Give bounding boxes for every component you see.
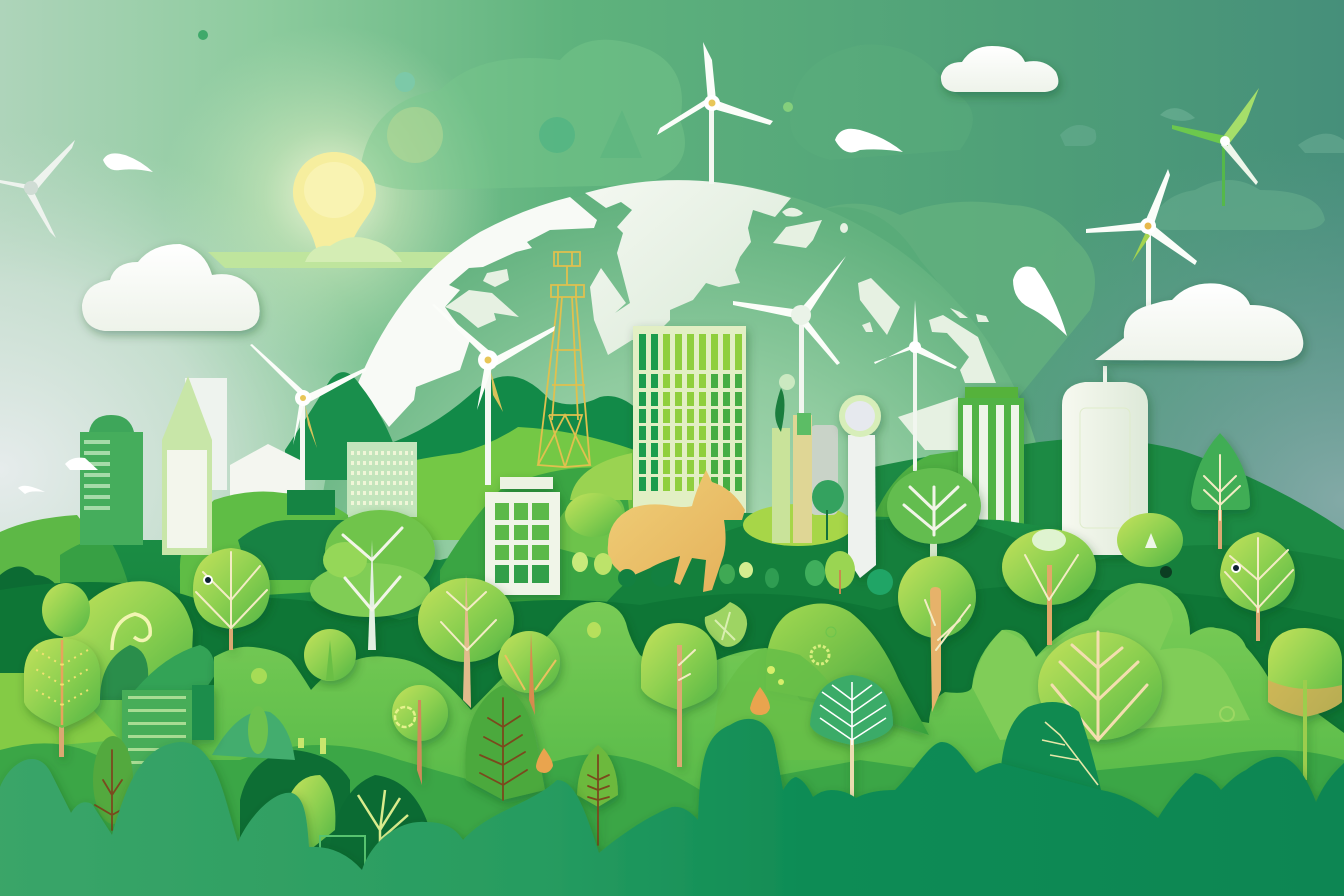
base dark ground bbox=[0, 510, 1344, 896]
teal arch bbox=[212, 711, 295, 760]
bare pale tree bbox=[358, 790, 408, 855]
tree: white crown above lamp bbox=[887, 468, 981, 560]
tree: round upper right bbox=[1002, 529, 1096, 645]
land: islands bbox=[445, 208, 996, 450]
right side mid hill bbox=[880, 518, 1344, 700]
land: west crescent bbox=[358, 197, 597, 427]
faint background clouds and bubbles bbox=[198, 30, 1344, 230]
background left buildings bbox=[185, 378, 417, 517]
large white building bbox=[1062, 366, 1148, 555]
small fence frame bbox=[320, 836, 365, 870]
wind turbine: right bbox=[1086, 169, 1197, 306]
grassy oval bbox=[743, 504, 853, 546]
wind turbine: centre left bbox=[432, 304, 555, 485]
dark oval hollow bbox=[240, 750, 350, 850]
tree: small lime ball bbox=[498, 631, 560, 715]
white back tower bbox=[185, 378, 227, 490]
striped building bbox=[958, 387, 1024, 528]
lamp tower bbox=[839, 395, 881, 578]
right horizon bbox=[860, 439, 1344, 640]
pale dotted building bbox=[347, 442, 417, 517]
bare tree on dark hill bbox=[1042, 722, 1098, 785]
central dark band bbox=[0, 582, 1344, 780]
two small figures bbox=[298, 738, 326, 754]
tree: round thick trunk bbox=[898, 556, 976, 712]
skyscraper with green windows bbox=[633, 326, 746, 516]
big green hills behind the globe bbox=[800, 202, 1095, 420]
left lime panel bbox=[0, 673, 120, 750]
front forest silhouette bbox=[0, 719, 1344, 896]
main bright sheet bbox=[0, 583, 1344, 860]
dark hill with bare tree bbox=[328, 775, 430, 880]
slim towers, lamp and grey block bbox=[772, 374, 838, 543]
light hill bbox=[395, 427, 640, 540]
tree: big foreground bbox=[1038, 632, 1162, 740]
green terrace with dark hut bbox=[238, 520, 348, 580]
land: asia bbox=[585, 180, 791, 355]
leaf top left bbox=[135, 645, 215, 690]
tree: tombstone left bbox=[24, 638, 100, 757]
wind turbine: left city bbox=[250, 344, 367, 493]
lighter hill right bbox=[972, 583, 1250, 740]
wind turbine: thin bbox=[874, 300, 957, 471]
left small ball tree bbox=[42, 583, 90, 637]
bottom hill band bbox=[0, 743, 1344, 896]
white house bbox=[230, 444, 300, 500]
tree: small with rings bbox=[392, 685, 448, 785]
centre rolling hill bbox=[440, 468, 640, 620]
clouds bbox=[82, 46, 1303, 361]
left hill bbox=[0, 515, 110, 600]
left front buildings bbox=[80, 376, 212, 555]
back hills and horizon bbox=[285, 372, 1344, 640]
bright foreground hills bbox=[0, 581, 1344, 896]
clover shrub bbox=[705, 602, 747, 647]
globe bbox=[319, 180, 1051, 896]
wind turbine: centre right large bbox=[733, 256, 846, 435]
wind turbine: far left bbox=[0, 140, 75, 238]
wind turbine: behind globe top bbox=[657, 42, 773, 184]
leaf shapes bbox=[18, 129, 1067, 494]
turbines in front of hills bbox=[250, 304, 555, 493]
striped building left lower bbox=[122, 685, 214, 780]
dark leaf bbox=[100, 645, 148, 720]
spiral on hill bbox=[112, 614, 150, 650]
mid ground hills bbox=[0, 453, 1344, 896]
green striped building bbox=[80, 415, 143, 545]
transmission tower bbox=[538, 252, 590, 467]
triangular roof building bbox=[162, 376, 212, 555]
sun lightbulb bbox=[208, 152, 455, 268]
hill accents: circles and dots bbox=[251, 566, 1234, 721]
small round shrubs bbox=[572, 480, 893, 595]
cloud: top bbox=[941, 46, 1058, 92]
small ball bbox=[290, 775, 335, 850]
dark hump bbox=[600, 520, 930, 640]
tree: small conifer bbox=[577, 745, 618, 845]
tree: white layered bbox=[310, 510, 435, 650]
central left blob bbox=[180, 492, 348, 600]
dark hill in front of big tree bbox=[1000, 702, 1101, 820]
tree: teal fern bbox=[810, 675, 893, 798]
tree: leaf far right bbox=[1220, 532, 1295, 641]
dome hill bbox=[766, 604, 929, 735]
globe ocean bbox=[319, 181, 1051, 896]
tree: tall thin centre right bbox=[641, 623, 717, 767]
green round bush bbox=[1117, 513, 1183, 567]
light hump bbox=[710, 648, 850, 760]
tree: far right tombstone bbox=[1268, 628, 1342, 780]
cloud: left bbox=[82, 244, 260, 331]
right turbines in front of globe bbox=[733, 256, 957, 471]
tree: dark left small bbox=[93, 736, 133, 830]
tree: ball with veins bbox=[193, 548, 270, 650]
tree: round gold trunk bbox=[418, 575, 514, 708]
wind turbine: upper right green bbox=[1172, 88, 1259, 206]
dark peak left bbox=[285, 372, 394, 480]
dark peaks behind tower bbox=[385, 376, 640, 500]
orange droplets bbox=[536, 687, 770, 773]
tree: small oval bbox=[304, 629, 356, 681]
cloud: right bbox=[1095, 283, 1303, 361]
golden animal bbox=[608, 470, 745, 592]
hillside round bush bbox=[565, 493, 623, 537]
white office building bbox=[485, 477, 560, 595]
tree: dark conifer bbox=[465, 685, 545, 800]
left blob behind spiral bbox=[62, 581, 193, 700]
tree: top right leaf bbox=[1191, 433, 1250, 549]
